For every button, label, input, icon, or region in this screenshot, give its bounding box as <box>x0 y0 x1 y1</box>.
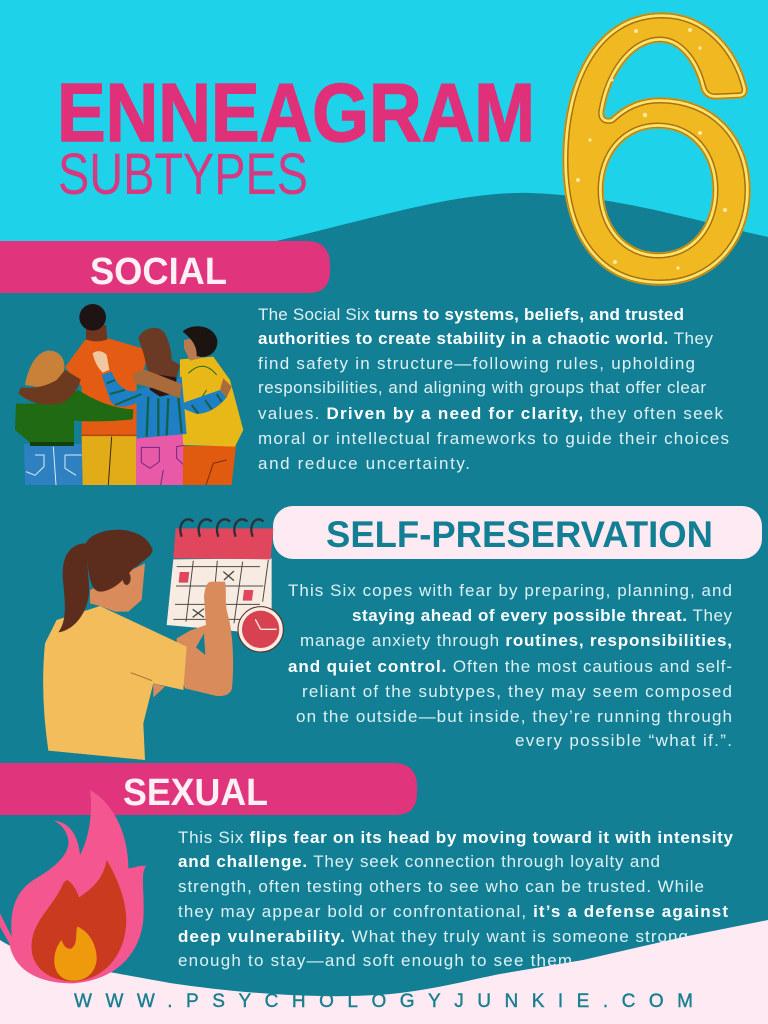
yellow hoodie <box>180 357 243 447</box>
blond hair <box>25 351 64 390</box>
icon: flame <box>0 790 146 983</box>
text block: social description: find safety in structure—following rules, upholding <box>258 354 695 373</box>
orange pants right <box>183 446 236 485</box>
woman hair <box>138 328 180 377</box>
title: ENNEAGRAM <box>57 66 535 159</box>
yellow trousers <box>82 436 137 485</box>
orange shirt <box>65 338 150 436</box>
panel: self-preservation heading pill: SELF-PRESERVATION <box>326 514 713 555</box>
striped arms <box>102 372 147 407</box>
panel: social heading band <box>0 241 330 293</box>
text block: social description: The Social Six turns to systems, beliefs, and trusted <box>258 305 684 324</box>
text block: social description: values. Driven by a need for clarity, they often seek <box>258 404 724 423</box>
illustration: woman marking a calendar <box>43 519 283 760</box>
icon: golden number six <box>563 13 750 285</box>
panel: self-preservation heading pill <box>273 506 762 559</box>
text block: self-preservation description: on the outside—but inside, they’re running through <box>296 707 732 726</box>
man arm over shoulder <box>18 370 81 405</box>
right person head <box>184 337 200 361</box>
hand on back <box>93 351 109 373</box>
panel: social heading band: SOCIAL <box>90 251 227 293</box>
text block: sexual description: and challenge. They seek connection through loyalty and <box>178 852 660 871</box>
striped top <box>137 377 187 438</box>
text block: self-preservation description: staying ahead of every possible threat. They <box>352 606 732 625</box>
footer website: WWW.PSYCHOLOGYJUNKIE.COM <box>74 991 693 1012</box>
text block: self-preservation description: every possible “what if.”. <box>515 731 732 750</box>
panel: sexual heading band <box>0 763 417 815</box>
text block: social description <box>258 305 729 473</box>
pink trousers <box>136 433 185 485</box>
arm around <box>133 370 182 398</box>
clock <box>238 607 283 652</box>
calendar <box>167 558 272 632</box>
text block: self-preservation description: This Six copes with fear by preparing, planning, and <box>288 581 732 600</box>
text block: social description: authorities to create stability in a chaotic world. They <box>258 329 714 348</box>
man head and neck <box>86 325 107 341</box>
illustration: four friends hugging <box>15 304 243 485</box>
text block: social description: responsibilities, and aligning with groups that offer clear <box>258 378 706 397</box>
text block: sexual description: they may appear bold or confrontational, it’s a defense against <box>178 902 728 921</box>
text block: sexual description: deep vulnerability. What they truly want is someone strong <box>178 927 688 946</box>
text block: self-preservation description <box>288 581 732 750</box>
text block: sexual description <box>178 828 734 970</box>
panel: sexual heading band: SEXUAL <box>123 772 268 814</box>
shirt <box>43 606 187 760</box>
text block: self-preservation description: manage anxiety through routines, responsibilities, <box>300 631 732 650</box>
text block: sexual description: This Six flips fear on its head by moving toward it with intensity <box>178 828 734 847</box>
neck and face <box>90 563 145 612</box>
hair <box>86 530 153 592</box>
green sweater <box>15 390 133 445</box>
title: SUBTYPES <box>58 142 308 207</box>
text block: self-preservation description: reliant of the subtypes, they may seem composed <box>302 682 732 701</box>
text block: sexual description: enough to stay—and soft enough to see them. <box>178 951 578 970</box>
text block: social description: moral or intellectual frameworks to guide their choices <box>258 429 729 448</box>
arms <box>177 582 233 696</box>
pink bottom wave <box>0 920 768 1024</box>
jeans left person <box>24 444 83 485</box>
text block: social description: and reduce uncertainty. <box>258 454 470 473</box>
title <box>57 66 535 207</box>
text block: sexual description: strength, often testing others to see who can be trusted. While <box>178 877 704 896</box>
text block: self-preservation description: and quiet control. Often the most cautious and self- <box>288 657 732 676</box>
